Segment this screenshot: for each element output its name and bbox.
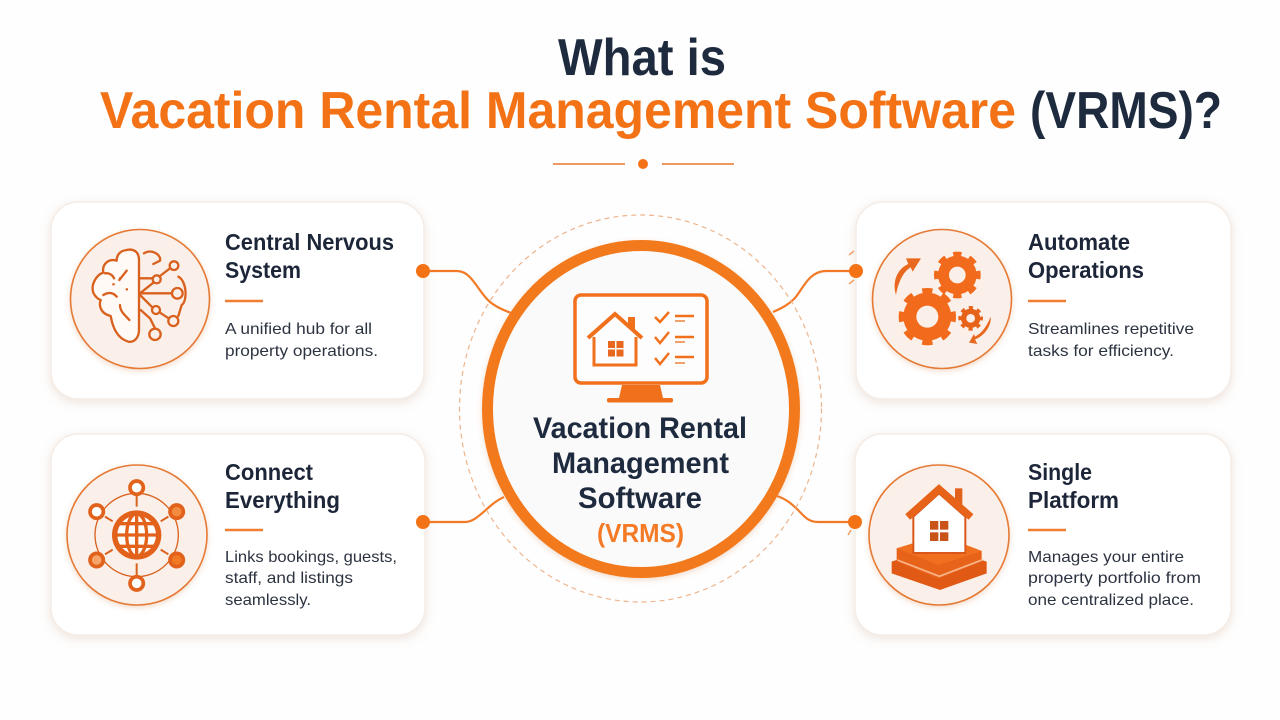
heading: central nervous system <box>225 229 394 283</box>
hub label: Vacation Rental <box>533 412 747 445</box>
panel: central nervous system <box>51 202 424 399</box>
heading: automate operations: Automate <box>1028 229 1130 255</box>
description: single platform: property portfolio from <box>1028 570 1201 587</box>
title: What is <box>558 29 726 87</box>
description: connect everything: Links bookings, guests, <box>225 549 397 566</box>
connector: single platform <box>777 496 862 535</box>
title: Vacation Rental Management Software <box>100 82 1016 140</box>
heading: central nervous system: System <box>225 257 301 283</box>
icon: brain with circuit nodes <box>70 230 210 368</box>
description: connect everything: seamlessly. <box>225 592 311 609</box>
connector: central nervous system <box>416 264 511 313</box>
panel: single platform <box>855 434 1231 635</box>
description: automate operations <box>1028 321 1194 360</box>
connector: connect everything <box>416 497 504 529</box>
icon: gears with arrows <box>872 230 1012 368</box>
heading: single platform: Single <box>1028 459 1092 485</box>
title divider <box>553 159 734 169</box>
description: single platform: Manages your entire <box>1028 549 1184 566</box>
heading: single platform <box>1028 459 1119 513</box>
description: central nervous system: A unified hub for all <box>225 321 372 338</box>
connector: automate operations <box>773 251 863 312</box>
description: central nervous system <box>225 321 378 360</box>
heading: automate operations <box>1028 229 1144 283</box>
hub label: Management <box>552 447 729 480</box>
description: single platform: one centralized place. <box>1028 592 1194 609</box>
panel: automate operations <box>856 202 1231 399</box>
icon: house on platform <box>869 465 1009 605</box>
heading: connect everything: Everything <box>225 487 340 513</box>
hub label: Software <box>578 482 702 515</box>
heading: central nervous system: Central Nervous <box>225 229 394 255</box>
description: single platform <box>1028 549 1201 609</box>
heading: connect everything: Connect <box>225 459 313 485</box>
description: connect everything: staff, and listings <box>225 570 353 587</box>
heading: single platform: Platform <box>1028 487 1119 513</box>
hub label <box>533 412 747 548</box>
icon: monitor with house and checklist <box>575 295 707 402</box>
description: automate operations: tasks for efficiency. <box>1028 343 1174 360</box>
heading: automate operations: Operations <box>1028 257 1144 283</box>
description: connect everything <box>225 549 397 609</box>
icon: globe network <box>67 465 207 605</box>
heading: connect everything <box>225 459 340 513</box>
title: (VRMS)? <box>1030 82 1222 140</box>
description: central nervous system: property operations. <box>225 343 378 360</box>
panel: connect everything <box>51 434 425 635</box>
title <box>100 29 1222 140</box>
central hub <box>460 215 822 602</box>
description: automate operations: Streamlines repetitive <box>1028 321 1194 338</box>
hub label: (VRMS) <box>597 518 684 548</box>
